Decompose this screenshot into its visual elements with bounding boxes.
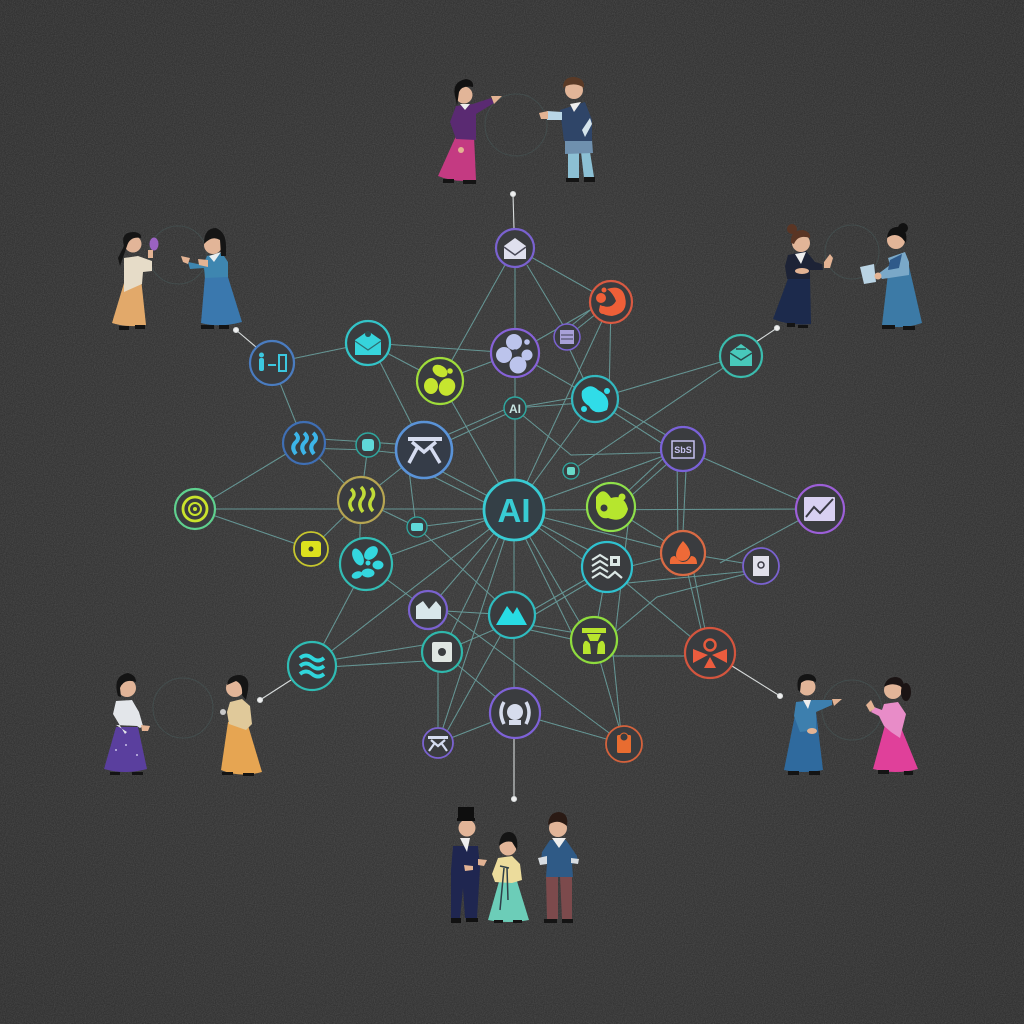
faint dialogue circles between figures [149,94,882,740]
small AI node: AI [509,402,521,416]
node: tiny teal [563,463,579,479]
node: lion [490,688,540,738]
figures: upper right pair [773,223,922,330]
node: small bag [407,517,427,537]
node: small purple calendar [554,324,580,350]
node: orange phone [606,726,642,762]
woman in white jacket and purple skirt [104,673,150,775]
man in navy vest and light blue trousers [539,77,595,182]
node: chevrons [582,542,632,592]
figures: top pair [438,77,595,184]
node: yellow box [294,532,328,566]
central AI hub [484,480,544,540]
node: lime helmet [571,617,617,663]
node: chart [796,485,844,533]
figures: bottom trio [451,807,579,923]
node: fan [340,538,392,590]
node: purple blob [491,329,539,377]
network connection lines [195,248,820,744]
node: lime splat [587,483,635,531]
woman in cream jacket and peach skirt [112,232,158,330]
woman in blue hanbok [181,228,242,329]
node: red ankh [685,628,735,678]
node: teal envelope [346,321,390,365]
woman in purple jacket and magenta skirt [438,79,502,184]
node: lime blob [417,358,463,404]
small AI node [504,397,526,419]
node: small teal [356,433,380,457]
node: envelope top [496,229,534,267]
woman in navy hanbok [773,224,833,328]
node: purple mountain [409,591,447,629]
node: teal waves [288,642,336,690]
node: cyan blob [572,376,618,422]
girl in yellow jacket and mint skirt [488,832,529,923]
node: target [175,489,215,529]
node: circuit board purple: SbS [674,445,692,455]
node: blue person sign [250,341,294,385]
figures: lower left pair [104,673,262,776]
node: heat waves [338,477,384,523]
node: red blob [590,281,632,323]
woman in cream jacket and orange skirt [220,675,262,776]
central AI hub: AI [498,492,530,529]
node: teal mountain [489,592,535,638]
woman in pink hanbok [866,677,918,775]
man in navy robe and black hat [451,807,487,923]
node: small table [423,728,453,758]
node: circuit board purple [661,427,705,471]
node: teal building [720,335,762,377]
connector leaders with end dots [234,192,782,802]
man in blue robe [784,674,842,775]
node: blue waves [283,422,325,464]
node: orange drop [661,531,705,575]
node: table icon [396,422,452,478]
woman in blue hanbok holding paper [860,223,922,330]
node: square film [422,632,462,672]
figures: upper left pair [112,228,242,330]
man in blue jacket and maroon trousers [538,812,579,923]
figures: lower right pair [784,674,918,775]
node: small document [743,548,779,584]
